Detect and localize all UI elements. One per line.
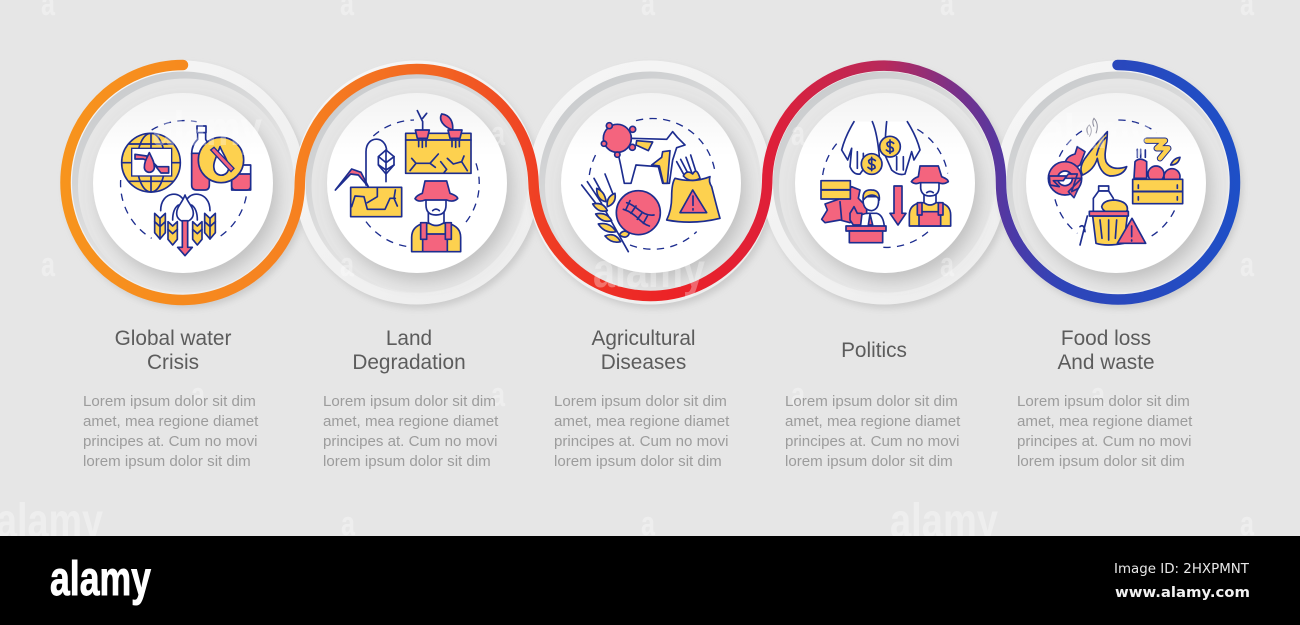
- alamy logo: alamy: [50, 553, 151, 606]
- column 4 text: amet, mea regione diamet: [785, 413, 961, 430]
- column 1 text: principes at. Cum no movi: [83, 433, 258, 450]
- watermarks: alamy: [890, 495, 998, 548]
- watermarks: a: [641, 505, 656, 543]
- watermarks: alamy: [1043, 106, 1151, 159]
- disc 5: [996, 60, 1240, 304]
- icon: politics: [821, 122, 951, 247]
- disc 4: [762, 60, 1006, 304]
- column 5 text: principes at. Cum no movi: [1017, 433, 1192, 450]
- column 2 text: [323, 327, 499, 470]
- icon: land degradation: [335, 111, 479, 252]
- icon: food loss and waste: [1048, 118, 1183, 245]
- black footer bar: [0, 536, 1300, 625]
- watermarks: a: [340, 246, 355, 284]
- image id: Image ID: 2HXPMNT: [1114, 562, 1249, 577]
- watermarks: a: [1091, 376, 1106, 414]
- column 2 text: Lorem ipsum dolor sit dim: [323, 393, 496, 410]
- column 3 text: Agricultural: [591, 327, 696, 350]
- column 3 text: amet, mea regione diamet: [554, 413, 730, 430]
- column 5 text: And waste: [1057, 351, 1155, 374]
- watermarks: a: [791, 115, 806, 153]
- column 4 text: principes at. Cum no movi: [785, 433, 960, 450]
- column 3 text: Lorem ipsum dolor sit dim: [554, 393, 727, 410]
- watermarks: a: [191, 376, 206, 414]
- column 3 text: principes at. Cum no movi: [554, 433, 728, 450]
- disc 2: [294, 60, 538, 304]
- column 2 text: lorem ipsum dolor sit dim: [323, 453, 491, 470]
- column 4 text: Lorem ipsum dolor sit dim: [785, 393, 958, 410]
- column 5 text: [1017, 327, 1193, 470]
- icon: global water crisis: [121, 121, 251, 256]
- watermarks: a: [1240, 505, 1255, 543]
- column 1 text: [83, 327, 259, 470]
- watermarks: a: [341, 505, 356, 543]
- watermarks: a: [491, 376, 506, 414]
- gradient ribbon connecting the five circles: [65, 65, 1235, 300]
- watermarks: a: [791, 376, 806, 414]
- disc 1: [61, 60, 305, 304]
- watermarks: a: [491, 115, 506, 153]
- column 3 text: [554, 327, 730, 470]
- column 1 text: amet, mea regione diamet: [83, 413, 259, 430]
- column 2 text: amet, mea regione diamet: [323, 413, 499, 430]
- column 4 text: lorem ipsum dolor sit dim: [785, 453, 953, 470]
- watermarks: alamy: [0, 495, 103, 548]
- watermarks: alamy: [593, 245, 705, 298]
- column 4 text: Politics: [841, 339, 907, 362]
- watermarks: a: [41, 246, 56, 284]
- icon: agricultural diseases: [582, 118, 720, 252]
- column 1 text: Global water: [115, 327, 231, 350]
- column 2 text: principes at. Cum no movi: [323, 433, 498, 450]
- column 3 text: Diseases: [601, 351, 686, 374]
- column 3 text: lorem ipsum dolor sit dim: [554, 453, 722, 470]
- column 5 text: Food loss: [1061, 327, 1151, 350]
- column 5 text: lorem ipsum dolor sit dim: [1017, 453, 1185, 470]
- website: www.alamy.com: [1115, 585, 1250, 601]
- column 4 text: [785, 339, 961, 470]
- column 1 text: Crisis: [147, 351, 199, 374]
- panel: neumorphic discs: [61, 60, 1240, 304]
- watermarks: alamy: [152, 103, 262, 156]
- watermarks: a: [1240, 246, 1255, 284]
- column 2 text: Degradation: [352, 351, 466, 374]
- column 1 text: Lorem ipsum dolor sit dim: [83, 393, 256, 410]
- column 5 text: amet, mea regione diamet: [1017, 413, 1193, 430]
- column 1 text: lorem ipsum dolor sit dim: [83, 453, 251, 470]
- column 2 text: Land: [386, 327, 432, 350]
- disc 3: [528, 60, 772, 304]
- column 5 text: Lorem ipsum dolor sit dim: [1017, 393, 1190, 410]
- watermarks: a: [940, 246, 955, 284]
